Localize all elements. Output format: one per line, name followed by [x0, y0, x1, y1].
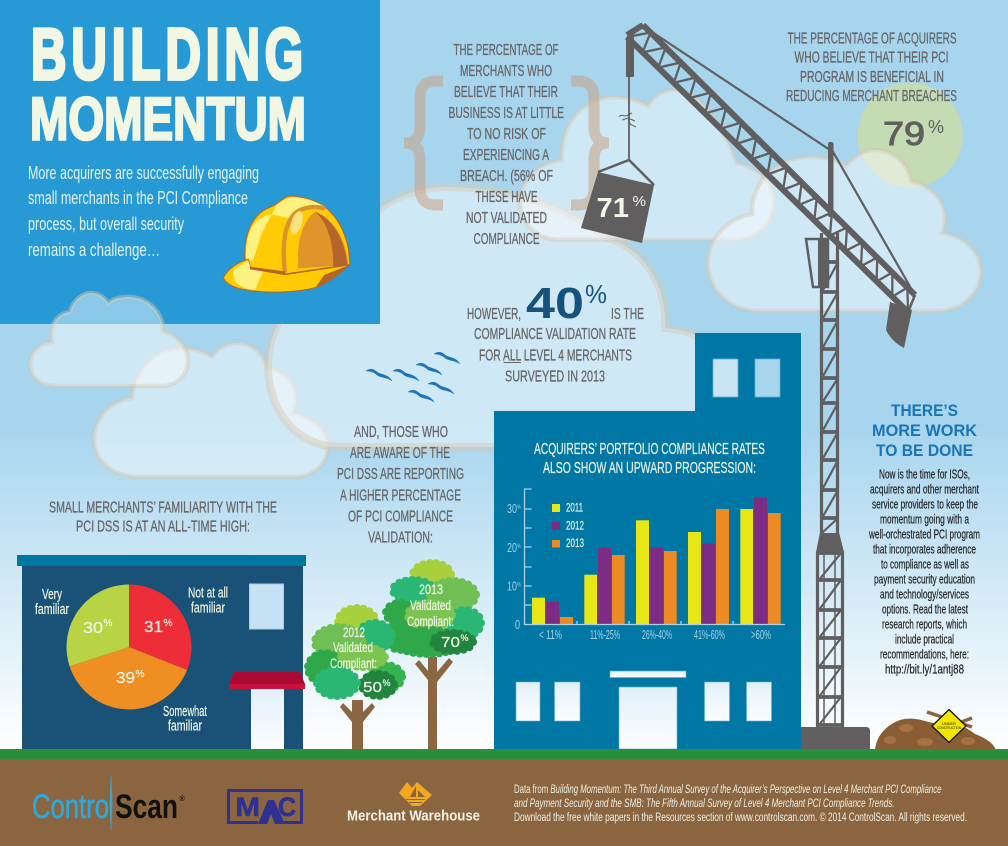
pie chart: familiarity: [67, 584, 191, 709]
icon: under construction sign: CONSTRUCTION: [937, 726, 961, 730]
heading: there's more work to be done: MORE WORK: [872, 421, 978, 440]
text: merchants at little risk: NOT VALIDATED: [466, 210, 547, 227]
logo: ControlScan: ®: [180, 795, 186, 803]
text: merchants at little risk: MERCHANTS WHO: [460, 63, 552, 80]
stat: 40 percent compliance rate: HOWEVER,: [467, 306, 521, 323]
y axis labels: %: [517, 505, 521, 511]
text: acquirers percentage: [786, 30, 957, 105]
tree: 2012 validated compliant: [308, 608, 402, 750]
cloud: behind hanging block: [520, 90, 774, 240]
text: merchants at little risk: BREACH. (56% OF: [460, 168, 553, 185]
stat: 40 percent compliance rate: COMPLIANCE VALIDATION RATE: [474, 326, 636, 343]
cloud: right: [708, 150, 981, 311]
icon: under construction sign: [932, 710, 966, 742]
heading: building momentum: BUILDING: [31, 15, 303, 95]
intro text: small merchants in the PCI Compliance: [28, 188, 248, 208]
logo: ControlScan: Contro: [32, 788, 109, 826]
cloud: lower left: [94, 343, 328, 477]
text: merchants at little risk: BUSINESS IS AT LITTLE: [448, 105, 564, 122]
bar chart: compliance rates: [507, 489, 785, 642]
crane: [619, 25, 915, 749]
x axis labels: < 11%: [539, 627, 562, 642]
chart axes: [524, 489, 785, 624]
title panel: [0, 0, 380, 324]
hanging block: 71 percent: [581, 160, 654, 243]
legend: 2012: [566, 518, 584, 532]
logo: Merchant Warehouse: Merchant Warehouse: [347, 808, 480, 824]
y axis labels: %: [517, 544, 521, 550]
large building with bar chart: [494, 333, 801, 750]
logo: MAC: [228, 790, 302, 824]
small building with pie chart: [17, 555, 306, 750]
x axis labels: 41%-60%: [694, 627, 725, 642]
footer panel: [0, 759, 1008, 846]
pie labels: Not at all: [188, 586, 228, 602]
ground floor windows and door: [516, 671, 772, 749]
chart title: [534, 441, 765, 477]
logo: MAC: M: [236, 792, 260, 822]
y axis labels: 20: [507, 540, 517, 555]
crane jib: [627, 25, 915, 312]
braces around merchants text: [404, 81, 609, 205]
x axis labels: >60%: [751, 627, 771, 642]
stat: 79 percent: 79: [883, 115, 925, 152]
pie labels: [35, 586, 228, 734]
pie chart: familiarity: 39: [116, 670, 135, 687]
pie labels: Very: [42, 587, 63, 603]
logo: MAC: C: [278, 792, 296, 822]
heading: building momentum: MOMENTUM: [30, 85, 306, 152]
heading: there's more work to be done: TO BE DONE: [876, 441, 973, 460]
text: merchants at little risk: BELIEVE THAT THEIR: [454, 84, 558, 101]
pie labels: Somewhat: [163, 704, 207, 720]
text: PCI DSS awareness: A HIGHER PERCENTAGE: [340, 488, 461, 504]
tree: 2013 validated compliant: 70: [441, 634, 460, 651]
text: PCI DSS awareness: OF PCI COMPLIANCE: [348, 508, 453, 526]
legend: 2011: [566, 501, 583, 515]
text: small merchants familiarity heading: SMALL MERCHANTS’ FAMILIARITY WITH THE: [49, 500, 277, 516]
crane cab: [806, 239, 828, 287]
text: merchants at little risk: COMPLIANCE: [474, 231, 540, 248]
building door: [251, 688, 284, 750]
crane stays: [643, 26, 912, 290]
icon: hard hat: [223, 196, 350, 292]
x axis labels: 11%-25%: [590, 627, 620, 642]
stat: 40 percent compliance rate: SURVEYED IN 2013: [505, 368, 605, 386]
text: more work body: [868, 467, 980, 676]
pie labels: familiar: [168, 718, 202, 734]
cloud: large center: [268, 187, 731, 447]
pie chart: familiarity: 30: [83, 620, 103, 637]
bars 2013: [560, 509, 781, 624]
green circle behind 79 percent: [858, 82, 962, 188]
stat: 40 percent compliance rate: [467, 279, 644, 386]
legend: 2013: [566, 536, 584, 550]
tree: 2012 validated compliant: Validated: [333, 639, 373, 655]
text: PCI DSS awareness: AND, THOSE WHO: [354, 424, 448, 441]
y axis labels: %: [517, 582, 521, 588]
pie chart: familiarity: %: [164, 618, 173, 629]
text: PCI DSS awareness: PCI DSS ARE REPORTING: [337, 466, 464, 483]
logo: ControlScan: Scan: [115, 788, 178, 826]
tree: 2013 validated compliant: Compliant:: [407, 613, 454, 629]
upper windows: [713, 359, 780, 397]
icon: under construction sign: UNDER: [942, 722, 957, 726]
legend: [552, 501, 584, 550]
chart title: ACQUIRERS’ PORTFOLIO COMPLIANCE RATES: [534, 441, 765, 458]
stat: 79 percent: [883, 115, 944, 152]
stat: 40 percent compliance rate: %: [585, 279, 607, 309]
pie chart: familiarity: %: [136, 669, 145, 680]
text: small merchants familiarity heading: PCI DSS IS AT AN ALL-TIME HIGH:: [76, 518, 250, 536]
text: PCI DSS awareness: VALIDATION:: [368, 530, 433, 546]
text: more work body: include practical: [895, 632, 954, 646]
text: merchants at little risk: EXPERIENCING A: [463, 147, 549, 164]
pie chart: familiarity: %: [104, 618, 113, 629]
text: merchants at little risk: THESE HAVE: [476, 189, 538, 206]
crane mast peak: [828, 142, 834, 217]
logo: ControlScan: [32, 776, 186, 830]
awning: [229, 672, 305, 689]
grass strip: [0, 749, 1008, 759]
stat: 40 percent compliance rate: FOR ALL LEVEL 4 MERCHANTS: [479, 348, 632, 364]
text: merchants at little risk: THE PERCENTAGE OF: [454, 42, 559, 59]
tree: 2013 validated compliant: %: [460, 633, 468, 643]
stat: 79 percent: %: [928, 117, 944, 137]
crane tower: [816, 233, 844, 728]
y axis labels: [507, 501, 521, 632]
intro text: process, but overall security: [28, 214, 184, 234]
heading: building momentum: [30, 15, 306, 152]
pie chart: familiarity: 31: [144, 619, 163, 636]
pie labels: familiar: [35, 602, 69, 618]
birds: [366, 352, 460, 402]
heading: there's more work to be done: THERE’S: [891, 401, 958, 420]
crane base: [801, 727, 870, 749]
cloud: upper left, over title panel: [30, 293, 188, 386]
intro text: More acquirers are successfully engaging: [28, 163, 259, 183]
text: more work body: http://bit.ly/1antj88: [885, 662, 964, 676]
tree: 2013 validated compliant: Validated: [410, 597, 451, 613]
hanging block: 71 percent: 71: [596, 192, 629, 223]
tree: 2013 validated compliant: [386, 563, 481, 750]
x axis labels: 26%-40%: [642, 627, 672, 642]
hanging block: 71 percent: %: [632, 193, 646, 210]
intro text: [28, 163, 259, 260]
source credits text: [514, 784, 967, 824]
chart title: ALSO SHOW AN UPWARD PROGRESSION:: [543, 460, 756, 477]
y axis labels: 0: [515, 617, 520, 632]
tree: 2012 validated compliant: 2012: [343, 624, 365, 640]
text: merchants at little risk: TO NO RISK OF: [467, 126, 546, 143]
bars 2011: [532, 509, 753, 624]
text: small merchants familiarity heading: [49, 500, 277, 536]
y axis labels: 10: [507, 578, 517, 594]
dirt pile with construction sign: [875, 710, 996, 750]
crane hook mast and cable: [619, 37, 636, 160]
stat: 40 percent compliance rate: IS THE: [611, 306, 644, 323]
tree: 2012 validated compliant: Compliant:: [330, 655, 377, 671]
x axis labels: [539, 627, 771, 642]
tree: 2012 validated compliant: %: [382, 678, 390, 688]
bars 2012: [546, 498, 767, 624]
building window: [250, 584, 284, 629]
heading: there's more work to be done: [872, 401, 978, 460]
crane counterweight: [886, 302, 912, 348]
text: PCI DSS awareness: [337, 424, 464, 546]
intro text: remains a challenge…: [28, 240, 160, 260]
text: merchants at little risk: [448, 42, 564, 248]
pie labels: familiar: [191, 600, 225, 616]
text: PCI DSS awareness: ARE AWARE OF THE: [350, 445, 450, 462]
y axis labels: 30: [507, 501, 517, 516]
tree: 2012 validated compliant: 50: [363, 679, 382, 696]
logo: Merchant Warehouse: [347, 782, 480, 824]
tree: 2013 validated compliant: 2013: [419, 581, 443, 597]
stat: 40 percent compliance rate: 40: [526, 279, 584, 328]
